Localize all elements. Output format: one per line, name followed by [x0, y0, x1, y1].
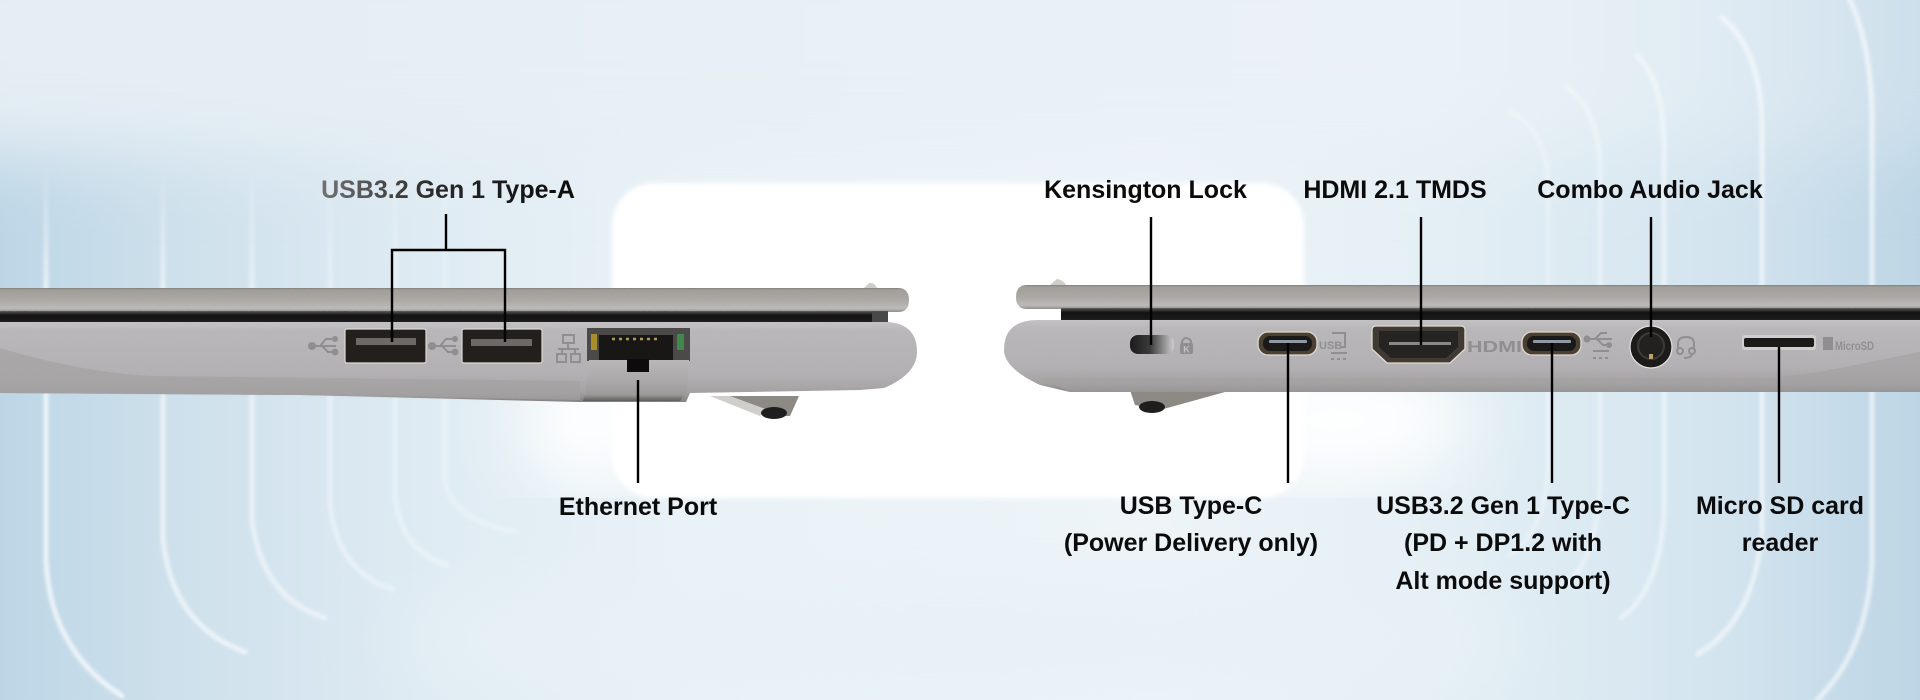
headset icon — [1677, 337, 1695, 358]
left laptop texture — [0, 288, 917, 402]
audio jack — [1630, 326, 1672, 368]
right laptop lid — [1016, 285, 1920, 309]
HDMI logo text: HDMI — [1467, 339, 1522, 356]
leader: audio — [1650, 217, 1652, 337]
USB icon 2 — [429, 337, 457, 354]
white center panel — [520, 183, 1470, 498]
ethernet flap notch — [627, 359, 649, 372]
laptop right side view — [1004, 279, 1920, 413]
left laptop lid — [0, 288, 909, 312]
right laptop foot — [1130, 390, 1225, 413]
label: Micro SD card reader: Micro SD card — [1696, 492, 1864, 520]
lock icon — [1180, 338, 1193, 354]
network icon — [557, 335, 580, 362]
lock icon: K — [1183, 344, 1190, 354]
label: HDMI 2.1 TMDS: HDMI 2.1 TMDS — [1303, 176, 1487, 204]
label: USB Type-C: USB Type-C — [1120, 492, 1262, 520]
right laptop rear pin — [1050, 279, 1066, 285]
USB PD icon: USB — [1319, 340, 1342, 352]
Kensington slot — [1130, 335, 1174, 354]
label: USB3.2 Gen 1 Type-C: USB3.2 Gen 1 Type-C — [1376, 492, 1630, 520]
HDMI port — [1372, 326, 1465, 363]
USB icon 3 — [1584, 333, 1612, 358]
label: USB3.2 Gen 1 Type-C: (PD + DP1.2 with — [1404, 529, 1602, 557]
leader: HDMI — [1420, 217, 1422, 345]
label: USB3.2 Gen 1 Type-C: Alt mode support) — [1395, 567, 1611, 595]
leader: Kensington — [1150, 217, 1152, 345]
label: USB3.2 Gen 1 Type-A: USB3.2 Gen 1 Type-A — [321, 176, 575, 204]
left laptop hinge gap — [0, 311, 872, 325]
leader: micro SD — [1778, 347, 1780, 483]
leader: USB3.2 Type-A bracket — [392, 214, 505, 342]
USB-A port 1 — [345, 329, 426, 363]
left laptop foot — [710, 396, 799, 419]
USB-C port 2 — [1522, 332, 1581, 355]
right laptop base — [1004, 320, 1920, 392]
right laptop hinge gap — [1061, 308, 1920, 323]
label: Kensington Lock: Kensington Lock — [1044, 176, 1247, 204]
left laptop base — [0, 322, 917, 402]
right laptop base lower contour — [1040, 352, 1920, 392]
leader: Ethernet — [637, 380, 639, 483]
ethernet flap — [583, 360, 689, 401]
USB-A port 2 — [462, 329, 542, 363]
leader: USB-C data — [1551, 343, 1553, 483]
micro SD logo — [1823, 337, 1874, 353]
left laptop rear pin — [864, 283, 877, 288]
USB PD icon — [1319, 333, 1347, 359]
label: Combo Audio Jack: Combo Audio Jack — [1537, 176, 1763, 204]
ethernet port — [587, 328, 690, 361]
label: Ethernet Port: Ethernet Port — [559, 493, 718, 521]
label: Micro SD card reader: reader — [1742, 529, 1818, 557]
USB-C port 1 — [1258, 332, 1317, 355]
laptop left side view — [0, 283, 917, 419]
label: USB Type-C: (Power Delivery only) — [1064, 529, 1318, 557]
leader: USB-C power — [1287, 343, 1289, 483]
micro SD logo: MicroSD — [1835, 339, 1874, 353]
left laptop base lower contour — [0, 348, 580, 400]
micro SD slot — [1742, 335, 1816, 350]
USB icon 1 — [309, 337, 337, 354]
right laptop texture — [1004, 285, 1920, 392]
